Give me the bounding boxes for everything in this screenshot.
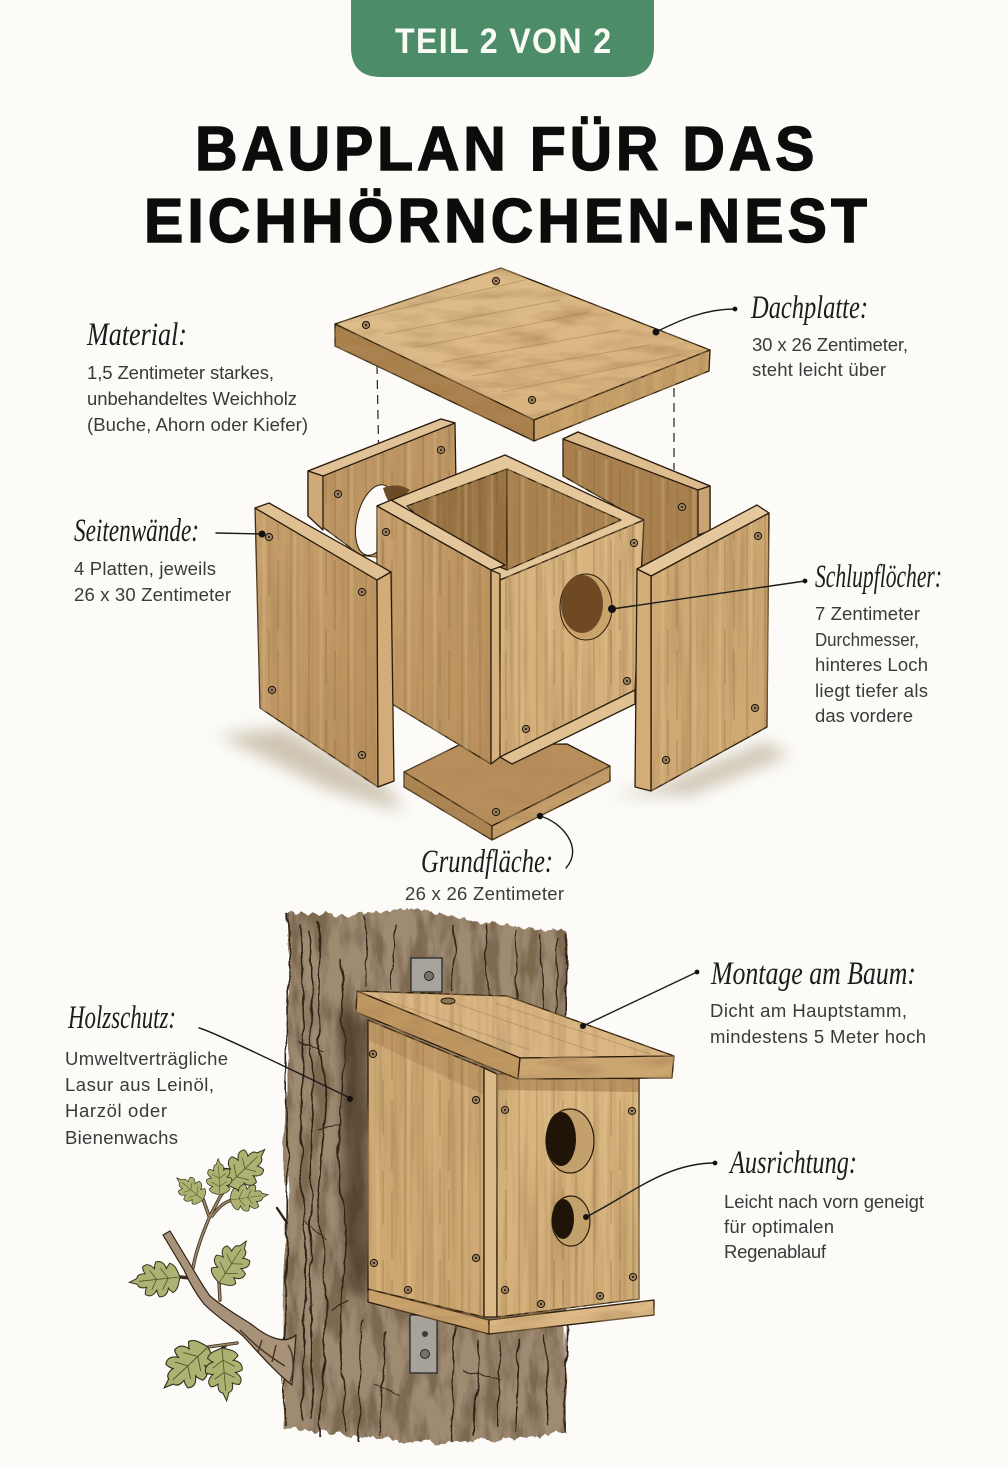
ground shadows <box>218 728 790 812</box>
bottom bracket <box>410 1315 437 1373</box>
callout: Schlupflöcher <box>608 559 942 726</box>
left panel <box>255 503 394 787</box>
right panel <box>635 505 769 791</box>
floor board <box>368 1289 654 1334</box>
callout: Schlupflöcher: das vordere <box>815 705 913 726</box>
callout: Holzschutz: Umweltverträgliche <box>65 1048 228 1069</box>
callout: Schlupflöcher: Durchmesser, <box>815 629 919 650</box>
callout: Ausrichtung: Leicht nach vorn geneigt <box>724 1191 924 1212</box>
callout: Montage am Baum <box>580 956 926 1047</box>
callout: Montage am Baum: Dicht am Hauptstamm, <box>710 1000 907 1021</box>
tree trunk <box>284 908 567 1444</box>
twigs <box>180 1185 237 1349</box>
bark cracks <box>284 915 567 1440</box>
screws <box>369 1050 637 1308</box>
callout: Holzschutz: Holzschutz: <box>67 1000 176 1036</box>
callout: Grundfläche: Grundfläche: <box>421 844 553 880</box>
title <box>144 114 867 255</box>
callout: Seitenwände: 26 x 30 Zentimeter <box>74 584 231 605</box>
callout: Ausrichtung: Ausrichtung: <box>729 1145 857 1181</box>
box side wall <box>368 1020 484 1317</box>
corner strip <box>484 1068 497 1317</box>
callout: Schlupflöcher: 7 Zentimeter <box>815 603 920 624</box>
box shadow on trunk <box>340 1005 368 1300</box>
base plate <box>404 744 610 840</box>
callout: Schlupflöcher: liegt tiefer als <box>815 680 928 701</box>
callout: Material: Material: <box>86 317 187 353</box>
top bracket <box>411 958 442 992</box>
callout: Holzschutz: Harzöl oder <box>65 1100 167 1121</box>
lower entrance hole <box>552 1196 590 1246</box>
centre box <box>377 455 644 764</box>
box front wall <box>497 1074 639 1317</box>
callout: Material: unbehandeltes Weichholz <box>87 388 297 409</box>
callout: Schlupflöcher: hinteres Loch <box>815 654 928 675</box>
back right panel <box>563 432 710 580</box>
callout: Ausrichtung: Regenablauf <box>724 1241 827 1262</box>
illustration: exploded nest box <box>218 268 790 840</box>
main limb <box>163 1231 296 1385</box>
callout: Holzschutz: Lasur aus Leinöl, <box>65 1074 214 1095</box>
callout: Schlupflöcher: Schlupflöcher: <box>815 559 942 595</box>
branch with leaves <box>127 1137 296 1403</box>
banner: Teil 2 von 2: TEIL 2 VON 2 <box>395 23 611 61</box>
dashed assembly guides <box>377 365 674 470</box>
callout: Ausrichtung: für optimalen <box>724 1216 834 1237</box>
callout: Seitenwände <box>74 513 266 605</box>
banner: Teil 2 von 2 <box>351 0 654 77</box>
callout: Holzschutz: Bienenwachs <box>65 1127 178 1148</box>
callout: Material: (Buche, Ahorn oder Kiefer) <box>87 414 308 435</box>
roof plate <box>335 268 710 441</box>
title: BAUPLAN FÜR DAS <box>195 114 814 183</box>
callout: Grundfläche <box>405 813 573 904</box>
callout: Ausrichtung <box>583 1145 924 1262</box>
illustration: mounted nest box on tree <box>127 908 674 1444</box>
callout: Material: 1,5 Zentimeter starkes, <box>87 362 274 383</box>
callout: Montage am Baum: mindestens 5 Meter hoch <box>710 1026 926 1047</box>
back left panel <box>308 419 456 560</box>
callout: Holzschutz <box>65 1000 353 1148</box>
callout: Dachplatte: 30 x 26 Zentimeter, <box>752 334 908 355</box>
oak leaves <box>216 1137 277 1198</box>
callout: Seitenwände: 4 Platten, jeweils <box>74 558 216 579</box>
callout: Dachplatte <box>652 290 908 380</box>
callout: Material <box>86 317 308 435</box>
callout: Montage am Baum: Montage am Baum: <box>710 956 916 992</box>
title: EICHHÖRNCHEN-NEST <box>144 186 867 255</box>
callout: Dachplatte: steht leicht über <box>752 359 886 380</box>
callout: Grundfläche: 26 x 26 Zentimeter <box>405 883 564 904</box>
callout: Dachplatte: Dachplatte: <box>750 290 868 326</box>
upper entrance hole <box>546 1109 594 1173</box>
sloped roof <box>356 991 674 1079</box>
callout: Seitenwände: Seitenwände: <box>74 513 199 549</box>
